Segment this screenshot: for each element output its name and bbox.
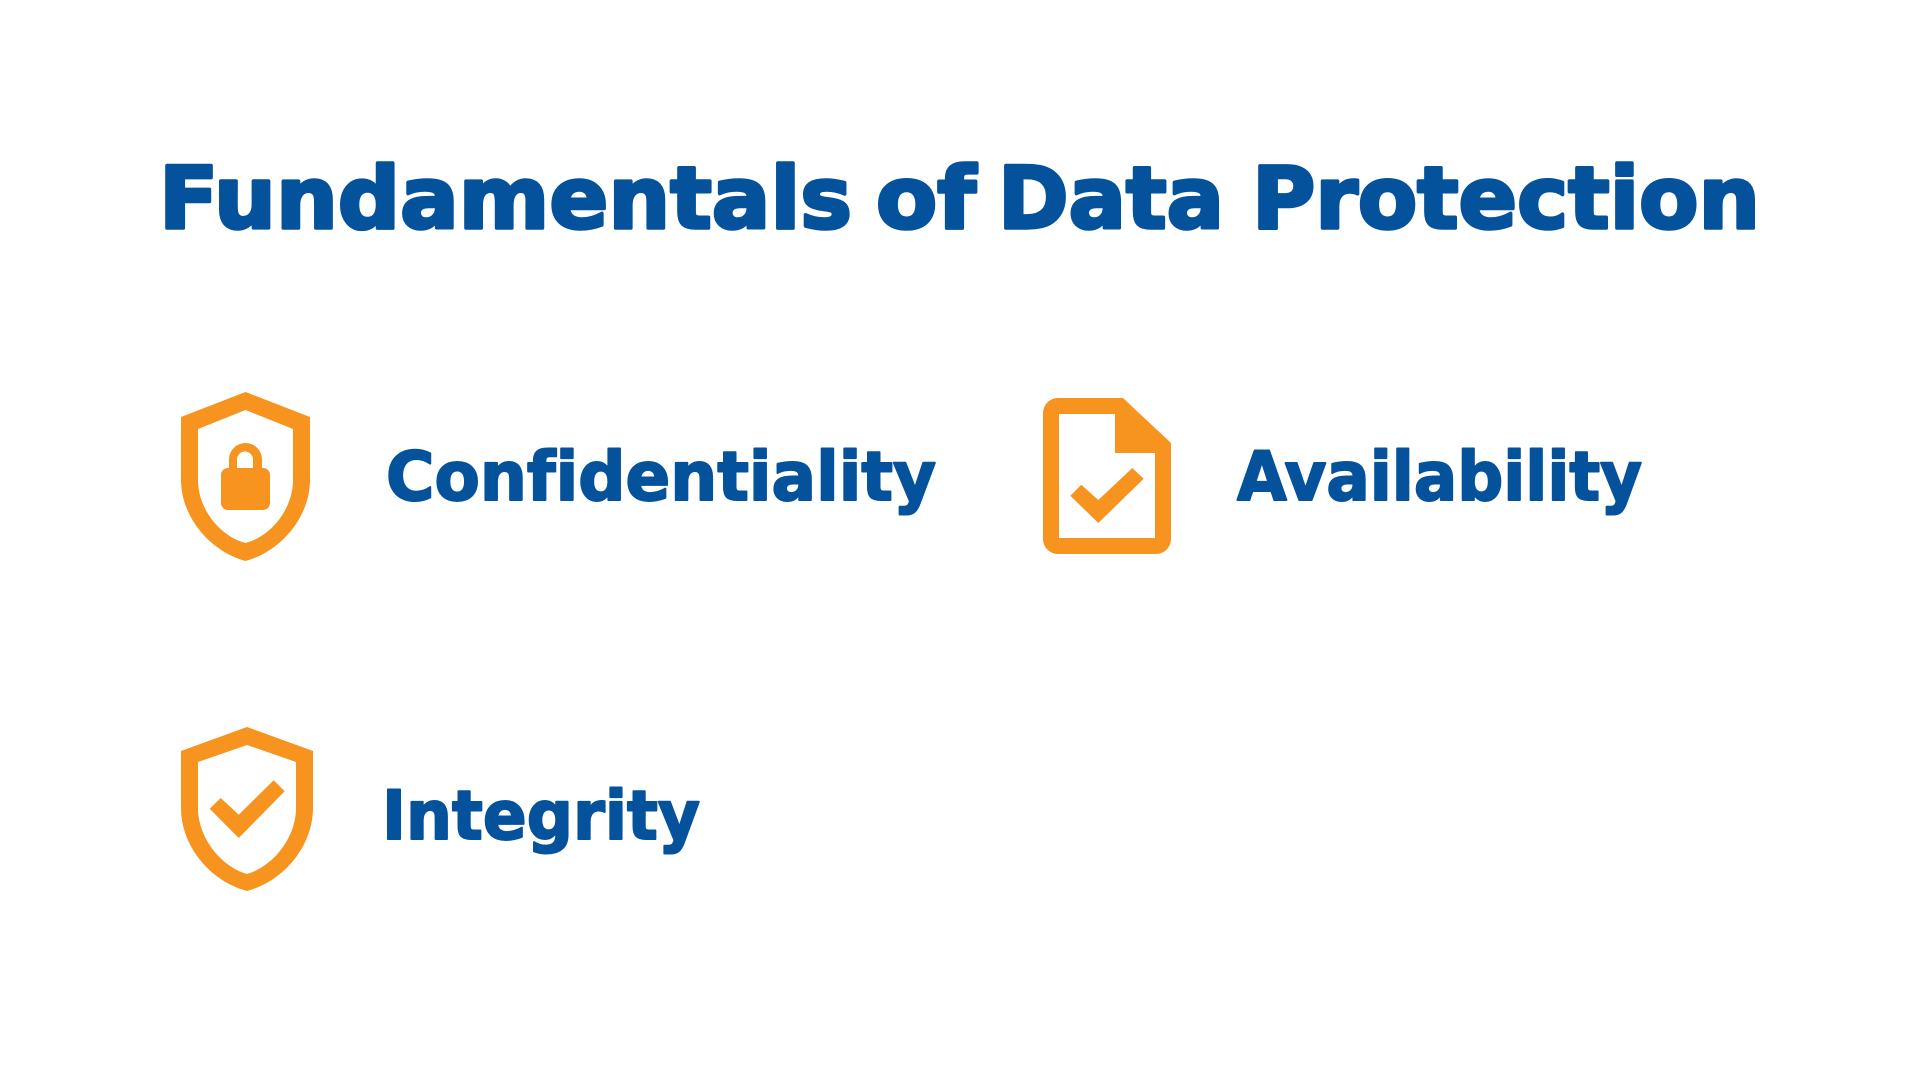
title: of — [876, 149, 978, 249]
title: Protection — [1252, 149, 1760, 249]
title: Fundamentals — [159, 149, 852, 249]
icon: shield with padlock — [181, 392, 310, 561]
title — [159, 149, 1760, 249]
label: Confidentiality: Confidentiality — [386, 438, 936, 517]
icon: document with check mark — [1043, 398, 1171, 554]
label: Integrity: Integrity — [382, 777, 700, 856]
label: Availability: Availability — [1237, 438, 1642, 517]
title: Data — [998, 149, 1224, 249]
icon: shield with check mark — [181, 727, 313, 891]
